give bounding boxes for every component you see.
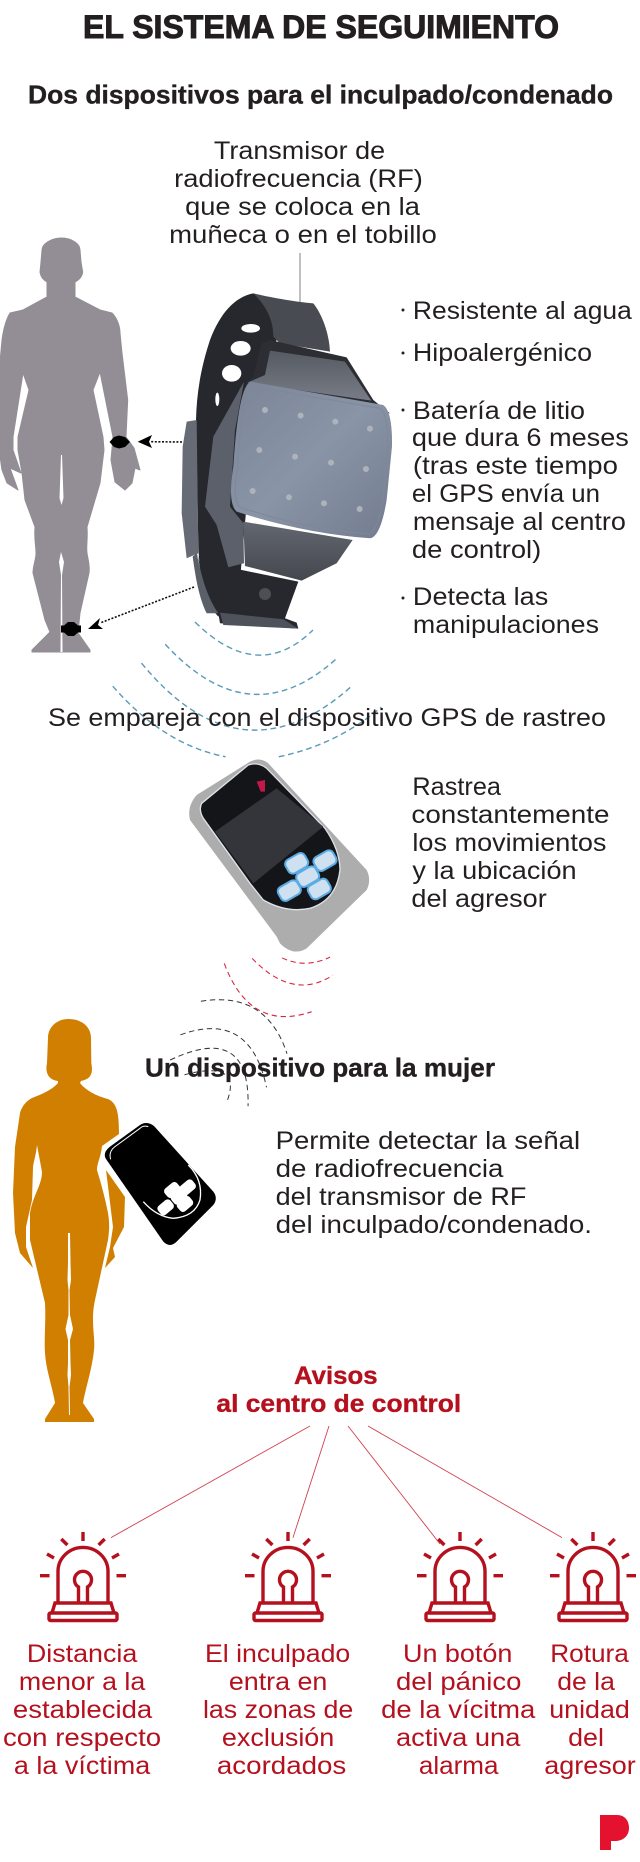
arrow: bracelet to wrist — [138, 435, 182, 448]
text block: RF transmitter description: muñeca o en el tobillo — [169, 221, 437, 249]
icon: siren 1 — [40, 1532, 126, 1620]
text block: alert 4: Rotura — [550, 1640, 629, 1668]
text block: victim device description: del inculpado/condenado. — [276, 1211, 592, 1239]
text block: alert 1: con respecto — [3, 1724, 161, 1752]
text block: RF transmitter description: radiofrecuencia (RF) — [174, 165, 423, 193]
text block: bracelet features: Detecta las — [413, 583, 548, 611]
text block: alert 2: las zonas de — [203, 1696, 353, 1724]
text block: GPS tracker description: y la ubicación — [412, 857, 577, 885]
text block: alert 4: unidad — [549, 1696, 630, 1724]
text block: bracelet features: Hipoalergénico — [413, 339, 592, 367]
text block: RF transmitter description: que se coloca en la — [185, 193, 420, 221]
connector lines — [111, 1426, 562, 1544]
text block: bracelet features: (tras este tiempo — [413, 452, 618, 480]
text block: alert 1: menor a la — [19, 1668, 145, 1696]
signal waves: blue — [113, 622, 381, 757]
icon: siren 2 — [245, 1532, 331, 1620]
icon: male silhouette — [0, 238, 140, 652]
heading: two devices for the accused: Dos dispositivos para el inculpado/condenado — [28, 80, 613, 110]
icon: siren 3 — [417, 1532, 503, 1620]
text block: victim device description — [276, 1127, 592, 1239]
text block: alert 1: a la víctima — [14, 1752, 150, 1780]
text block: alert 3 — [381, 1640, 535, 1780]
text block: alert 1 — [3, 1640, 161, 1780]
text block: GPS tracker description: del agresor — [411, 885, 547, 913]
text block: victim device description: de radiofrecuencia — [276, 1155, 504, 1183]
signal waves: black — [170, 1000, 287, 1106]
text block: bracelet features: Batería de litio — [413, 397, 585, 425]
text block: alert 3: activa una — [396, 1724, 521, 1752]
text block: victim device description: Permite detectar la señal — [276, 1127, 580, 1155]
title: EL SISTEMA DE SEGUIMIENTO — [83, 9, 559, 45]
text block: alert 1: Distancia — [27, 1640, 137, 1668]
text block: GPS tracker description — [411, 773, 609, 913]
text block: alert 2 — [203, 1640, 353, 1780]
text block: bracelet features: de control) — [412, 536, 541, 564]
icon: wrist band — [110, 436, 130, 448]
text block: alert 4: agresor — [544, 1752, 636, 1780]
icon: female silhouette — [13, 1019, 125, 1422]
text block: alert 2: entra en — [229, 1668, 327, 1696]
icon: ankle band — [61, 622, 81, 636]
text block: alert 4: del — [568, 1724, 604, 1752]
illustration: RF bracelet — [182, 293, 392, 629]
text block: bracelet features: Resistente al agua — [413, 297, 632, 325]
signal waves: red — [224, 957, 333, 1017]
text block: bracelet features: mensaje al centro — [413, 508, 626, 536]
text block: alert 3: de la vícitma — [381, 1696, 535, 1724]
text block: alert 3: Un botón — [403, 1640, 512, 1668]
text block: victim device description: del transmisor de RF — [276, 1183, 526, 1211]
text block: RF transmitter description: Transmisor de — [214, 137, 385, 165]
text block: alert 4 — [544, 1640, 636, 1780]
text block: RF transmitter description — [169, 137, 437, 249]
text: pairing with GPS: Se empareja con el dispositivo GPS de rastreo — [48, 704, 606, 732]
icon: siren 4 — [550, 1532, 636, 1620]
text block: GPS tracker description: Rastrea — [412, 773, 501, 801]
leader line to bracelet — [299, 253, 301, 309]
text block: GPS tracker description: constantemente — [411, 801, 609, 829]
text block: alert 2: El inculpado — [205, 1640, 350, 1668]
illustration: GPS tracker — [189, 760, 369, 952]
heading: alerts to the control centre: Avisos — [294, 1362, 378, 1390]
text block: alert 2: acordados — [217, 1752, 346, 1780]
text block: bracelet features: manipulaciones — [413, 611, 599, 639]
text block: alert 4: de la — [557, 1668, 615, 1696]
heading: alerts to the control centre: al centro de control — [216, 1390, 461, 1418]
text block: alert 3: del pánico — [396, 1668, 521, 1696]
text block: bracelet features: que dura 6 meses — [412, 424, 629, 452]
text block: alert 3: alarma — [419, 1752, 499, 1780]
text block: alert 2: exclusión — [222, 1724, 334, 1752]
illustration: victim device — [105, 1123, 216, 1245]
text block: alert 1: establecida — [13, 1696, 152, 1724]
text block: GPS tracker description: los movimientos — [412, 829, 606, 857]
logo: P mark — [600, 1815, 629, 1850]
arrow: bracelet to ankle — [88, 587, 194, 629]
text block: bracelet features — [401, 297, 632, 639]
heading: device for the woman: Un dispositivo para la mujer — [145, 1052, 495, 1082]
text block: bracelet features: el GPS envía un — [412, 480, 600, 508]
heading: alerts to the control centre — [216, 1362, 461, 1418]
